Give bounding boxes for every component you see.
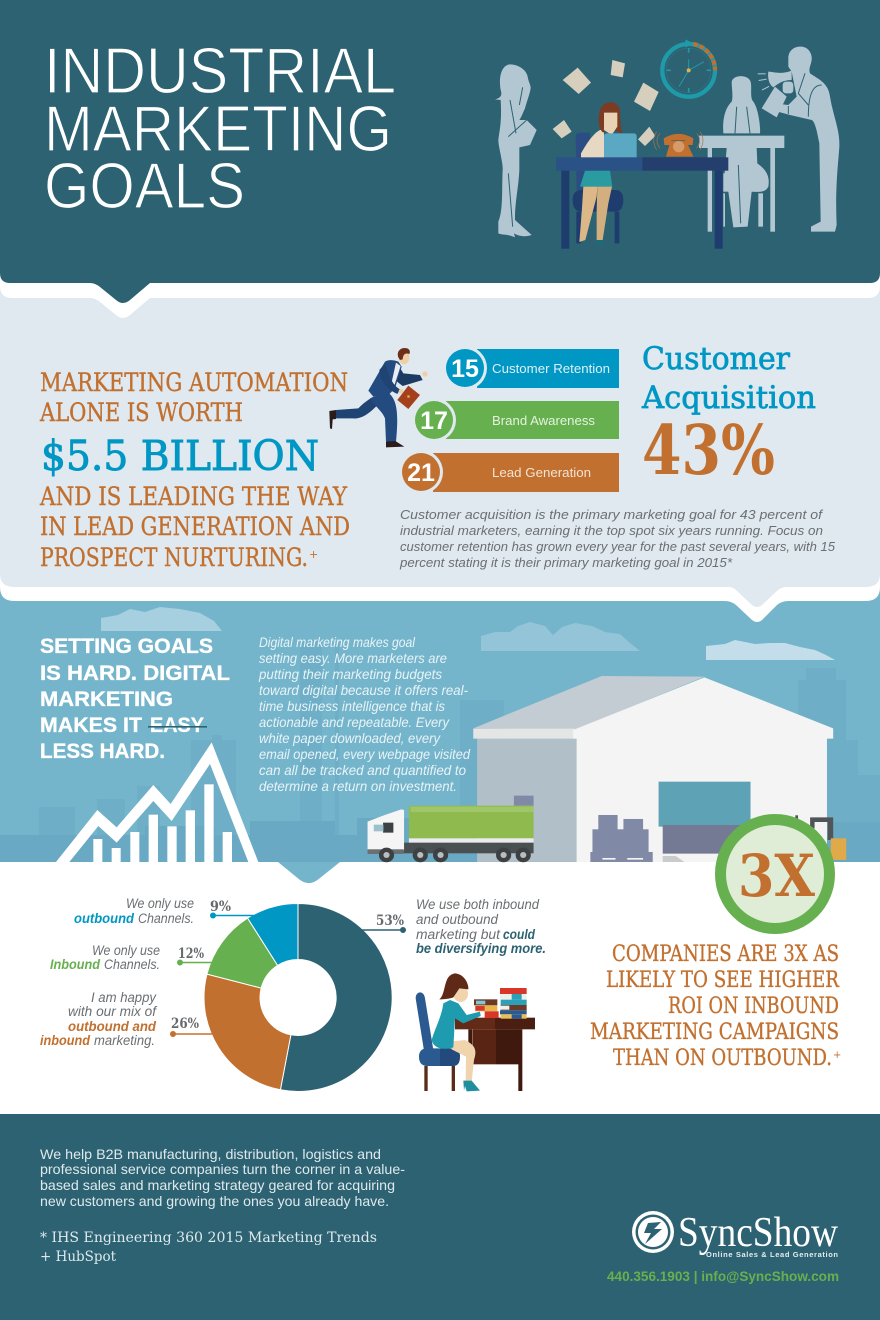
heading: marketing automation worth: AND IS LEADING THE WAY bbox=[39, 482, 347, 511]
slice: 53% bbox=[280, 903, 392, 1091]
label: both inbound and outbound bbox=[416, 897, 546, 956]
label: happy with mix bbox=[40, 990, 157, 1048]
text block: digital marketing description: setting easy. More marketers are bbox=[259, 650, 447, 666]
panel: header bbox=[0, 0, 880, 303]
white band and pointer under header bbox=[0, 270, 880, 318]
text block: digital marketing description: white paper downloaded, every bbox=[259, 730, 441, 746]
text block: 3X ROI: + bbox=[833, 1050, 841, 1061]
text block: digital marketing description: time business intelligence that is bbox=[259, 698, 445, 714]
leader: 9%: 9% bbox=[210, 899, 231, 915]
leader: 26%: 26% bbox=[171, 1016, 199, 1032]
heading: marketing automation worth: IN LEAD GENERATION AND bbox=[40, 512, 350, 541]
logo: SyncShow: SyncShow bbox=[678, 1210, 839, 1256]
label: inbound only: Inbound bbox=[50, 957, 101, 972]
text block: customer acquisition description: industrial marketers, earning it the top spot six years running. Focus on bbox=[400, 523, 823, 538]
heading: setting goals: EASY bbox=[150, 713, 204, 737]
silhouette: standing woman bbox=[495, 64, 537, 237]
badge: 3X: 3X bbox=[738, 842, 815, 910]
label: inbound only bbox=[50, 943, 160, 972]
cloud: centre bbox=[481, 622, 640, 651]
text block: company description: We help B2B manufacturing, distribution, logistics and bbox=[40, 1146, 381, 1162]
heading: setting goals: MAKES IT bbox=[40, 713, 142, 737]
text block: digital marketing description: determine a return on investment. bbox=[259, 778, 457, 794]
slice: 26% bbox=[204, 974, 291, 1090]
title: INDUSTRIAL bbox=[44, 34, 396, 107]
text block: 3X ROI: THAN ON OUTBOUND. bbox=[613, 1046, 832, 1071]
bar: lead generation 21: 21 bbox=[407, 459, 435, 487]
heading: customer acquisition 43%: Customer bbox=[642, 341, 790, 377]
desk bbox=[556, 157, 728, 249]
leader: 9% bbox=[210, 899, 262, 918]
label: happy with mix: inbound bbox=[40, 1033, 91, 1048]
logo: SyncShow: Online Sales & Lead Generation bbox=[706, 1250, 838, 1259]
bar: customer retention 15 bbox=[443, 346, 619, 390]
bar: brand awareness 17: 17 bbox=[420, 407, 448, 435]
text block: digital marketing description: toward digital because it offers real- bbox=[259, 682, 468, 698]
text block: digital marketing description bbox=[258, 634, 471, 794]
text block: digital marketing description: can all be tracked and quantified to bbox=[259, 762, 466, 778]
leader: 12%: 12% bbox=[178, 946, 204, 962]
label: both inbound and outbound: We use both inbound bbox=[416, 897, 539, 912]
text block: digital marketing description: Digital marketing makes goal bbox=[259, 634, 416, 650]
icon: rising line chart bbox=[56, 742, 258, 862]
label: outbound only bbox=[74, 896, 194, 926]
bar: customer retention 15: 15 bbox=[451, 355, 479, 383]
bar: brand awareness 17: Brand Awareness bbox=[492, 413, 595, 428]
heading: setting goals bbox=[40, 634, 230, 763]
text block: customer acquisition description: Customer acquisition is the primary marketing goal for 43 percent of bbox=[400, 507, 823, 522]
label: both inbound and outbound: and outbound bbox=[416, 912, 498, 927]
icon: seated woman at laptop bbox=[573, 102, 637, 244]
text block: 3X ROI bbox=[590, 942, 841, 1071]
label: inbound only: Channels. bbox=[104, 957, 160, 972]
label: inbound only: We only use bbox=[92, 943, 160, 958]
heading: marketing automation worth: $5.5 BILLION bbox=[41, 432, 319, 480]
text block: company description: professional service companies turn the corner in a value- bbox=[40, 1161, 405, 1177]
label: happy with mix: with our mix of bbox=[68, 1004, 157, 1019]
label: happy with mix: I am happy bbox=[91, 990, 157, 1005]
warehouse bbox=[368, 676, 846, 862]
bar: brand awareness 17 bbox=[412, 398, 619, 442]
leader: 26% bbox=[170, 1016, 212, 1037]
text block: sources bbox=[40, 1230, 377, 1265]
icon: running businessman bbox=[329, 348, 428, 447]
label: outbound only: Channels. bbox=[138, 911, 194, 926]
panel: marketing automation bbox=[0, 280, 880, 607]
text block: customer acquisition description: customer retention has grown every year for the past several years, with 15 bbox=[400, 539, 836, 554]
leader: 53% bbox=[360, 913, 406, 933]
donut chart bbox=[204, 903, 392, 1091]
truck bbox=[368, 796, 534, 862]
cloud: left bbox=[101, 607, 222, 631]
label: outbound only: We only use bbox=[126, 896, 194, 911]
text block: digital marketing description: email opened, every webpage visited bbox=[259, 746, 471, 762]
white band and pointer under automation panel bbox=[0, 280, 880, 622]
heading: marketing automation worth: + bbox=[309, 548, 318, 561]
text block: company description: new customers and growing the ones you already have. bbox=[40, 1193, 389, 1209]
silhouette: man with megaphone bbox=[758, 47, 839, 232]
label: both inbound and outbound: marketing but bbox=[416, 927, 501, 942]
text block: company description: based sales and marketing strategy geared for acquiring bbox=[40, 1177, 395, 1193]
label: both inbound and outbound: could bbox=[503, 927, 536, 942]
slice: 9% bbox=[248, 903, 298, 965]
label: outbound only: outbound bbox=[74, 911, 135, 926]
text block: digital marketing description: actionable and repeatable. Every bbox=[259, 714, 450, 730]
heading: setting goals: MARKETING bbox=[40, 687, 173, 711]
silhouette: seated woman bbox=[723, 76, 769, 227]
heading: customer acquisition 43%: 43% bbox=[642, 411, 775, 491]
bar: lead generation 21 bbox=[399, 450, 619, 494]
text block: sources: + HubSpot bbox=[40, 1249, 116, 1265]
title: GOALS bbox=[44, 149, 245, 222]
heading: setting goals: SETTING GOALS bbox=[40, 634, 213, 658]
text block: 3X ROI: ROI ON INBOUND bbox=[668, 994, 839, 1019]
heading: marketing automation worth: ALONE IS WORTH bbox=[39, 398, 243, 427]
silhouette: right table bbox=[699, 136, 784, 232]
text block: digital marketing description: putting their marketing budgets bbox=[258, 666, 442, 682]
heading: setting goals: LESS HARD. bbox=[40, 739, 165, 763]
label: happy with mix: outbound and bbox=[68, 1019, 157, 1034]
title bbox=[44, 34, 396, 222]
icon: woman at desk with binders bbox=[416, 973, 535, 1091]
panel: digital marketing scene bbox=[0, 587, 880, 862]
leader: 53%: 53% bbox=[376, 913, 404, 929]
bar: lead generation 21: Lead Generation bbox=[492, 465, 591, 480]
skyline bbox=[0, 640, 880, 862]
heading: marketing automation worth bbox=[39, 368, 350, 572]
forklift bbox=[795, 815, 846, 860]
icon: ringing telephone bbox=[654, 132, 703, 157]
text block: 3X ROI: LIKELY TO SEE HIGHER bbox=[606, 968, 840, 993]
text block: company description bbox=[40, 1146, 405, 1209]
text block: sources: * IHS Engineering 360 2015 Marketing Trends bbox=[40, 1230, 377, 1246]
heading: setting goals: IS HARD. DIGITAL bbox=[40, 661, 230, 685]
label: both inbound and outbound: be diversifying more. bbox=[416, 941, 546, 956]
icon: wall clock bbox=[662, 39, 715, 97]
label: happy with mix: marketing. bbox=[94, 1033, 155, 1048]
icon: flying papers bbox=[553, 60, 659, 146]
bar: customer retention 15: Customer Retention bbox=[492, 361, 610, 376]
heading: marketing automation worth: PROSPECT NURTURING. bbox=[40, 543, 308, 572]
pallets bbox=[590, 815, 653, 862]
heading: customer acquisition 43% bbox=[641, 341, 816, 491]
title: MARKETING bbox=[44, 92, 392, 165]
heading: marketing automation worth: MARKETING AUTOMATION bbox=[40, 368, 348, 397]
panel: footer bbox=[0, 1114, 880, 1320]
contact details: 440.356.1903 | info@SyncShow.com bbox=[607, 1268, 839, 1284]
slice: 12% bbox=[207, 918, 278, 988]
cloud: right bbox=[706, 640, 835, 660]
logo: SyncShow bbox=[632, 1210, 839, 1259]
heading: customer acquisition 43%: Acquisition bbox=[641, 380, 816, 416]
text block: customer acquisition description bbox=[399, 507, 836, 570]
badge: 3X bbox=[715, 814, 835, 934]
pointer: scene section into white bbox=[278, 862, 340, 883]
text block: customer acquisition description: percent stating it is their primary marketing goal in 2015* bbox=[399, 555, 733, 570]
illustration: stressed office workers bbox=[495, 39, 839, 249]
text block: 3X ROI: COMPANIES ARE 3X AS bbox=[612, 942, 839, 967]
